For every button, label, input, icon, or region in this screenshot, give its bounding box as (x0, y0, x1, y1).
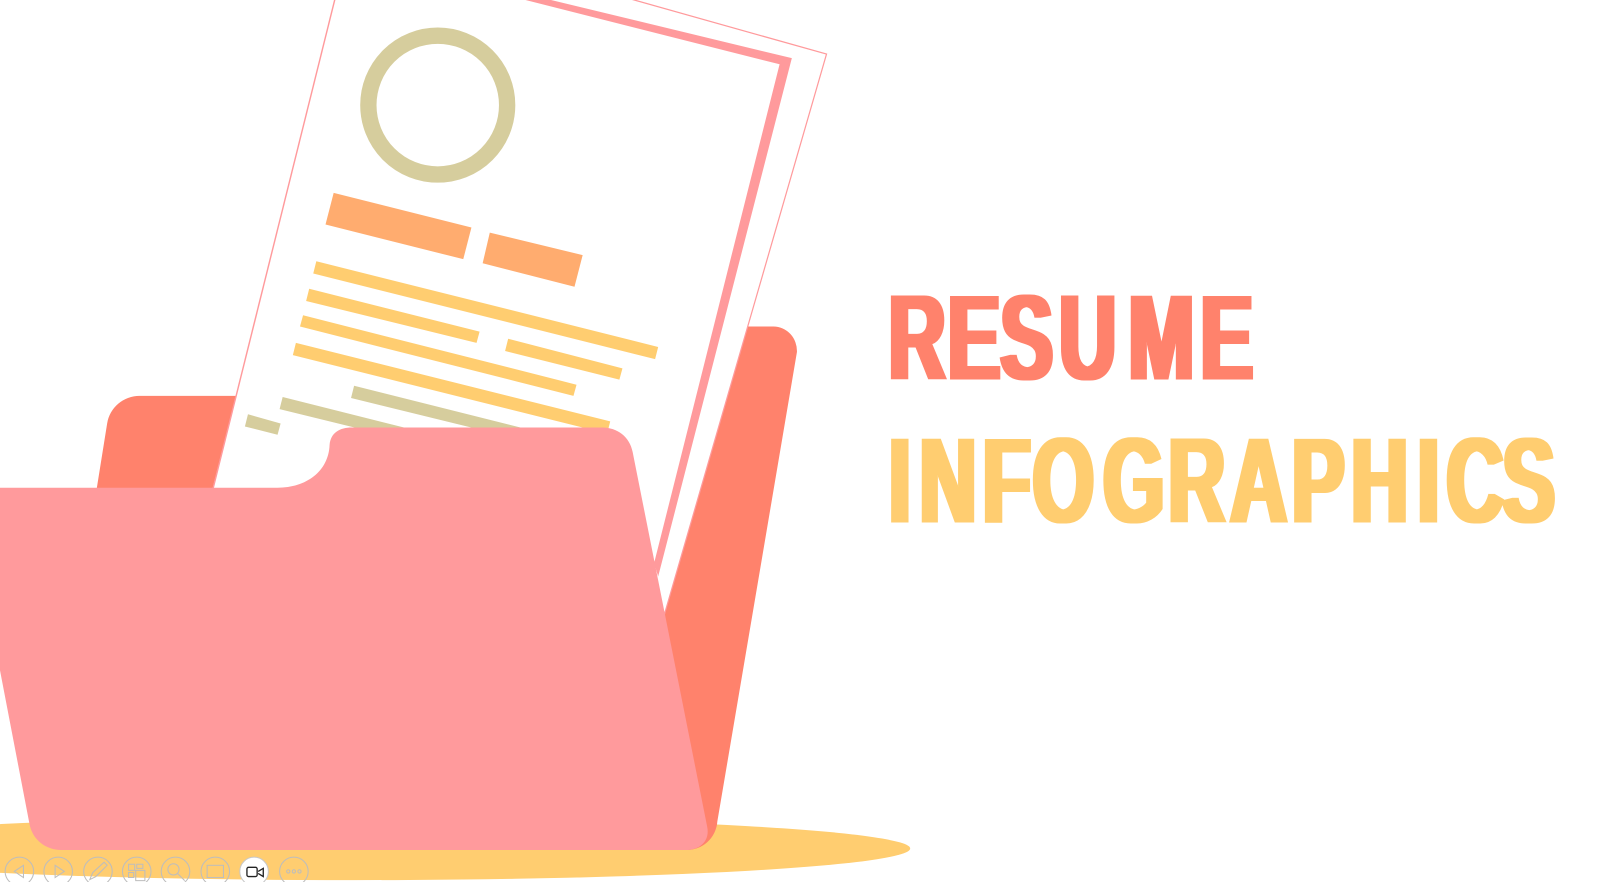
sheet white body (212, 0, 792, 571)
button: slides (122, 857, 151, 882)
back folder panel (87, 327, 797, 850)
button: video (240, 857, 268, 882)
yellow text lines (293, 261, 658, 434)
presentation toolbar (5, 857, 308, 882)
title: infographics: INFOGRAPHICS (889, 412, 1555, 549)
button: next (44, 857, 72, 882)
button: previous (5, 857, 34, 882)
button: pen (84, 857, 112, 882)
resume front sheet (212, 0, 792, 577)
front folder panel (0, 428, 708, 850)
button: screen (201, 857, 230, 882)
ground ellipse shadow (0, 817, 910, 880)
photo circle (368, 36, 507, 174)
khaki text lines (245, 386, 541, 445)
sheet thick top and right border (526, 0, 792, 577)
name bars (326, 193, 583, 287)
button: more (280, 857, 308, 882)
button: zoom (161, 857, 190, 882)
resume back sheet (306, 0, 827, 618)
title: resume: RESUME (889, 269, 1253, 406)
sheet left edge (213, 0, 335, 490)
